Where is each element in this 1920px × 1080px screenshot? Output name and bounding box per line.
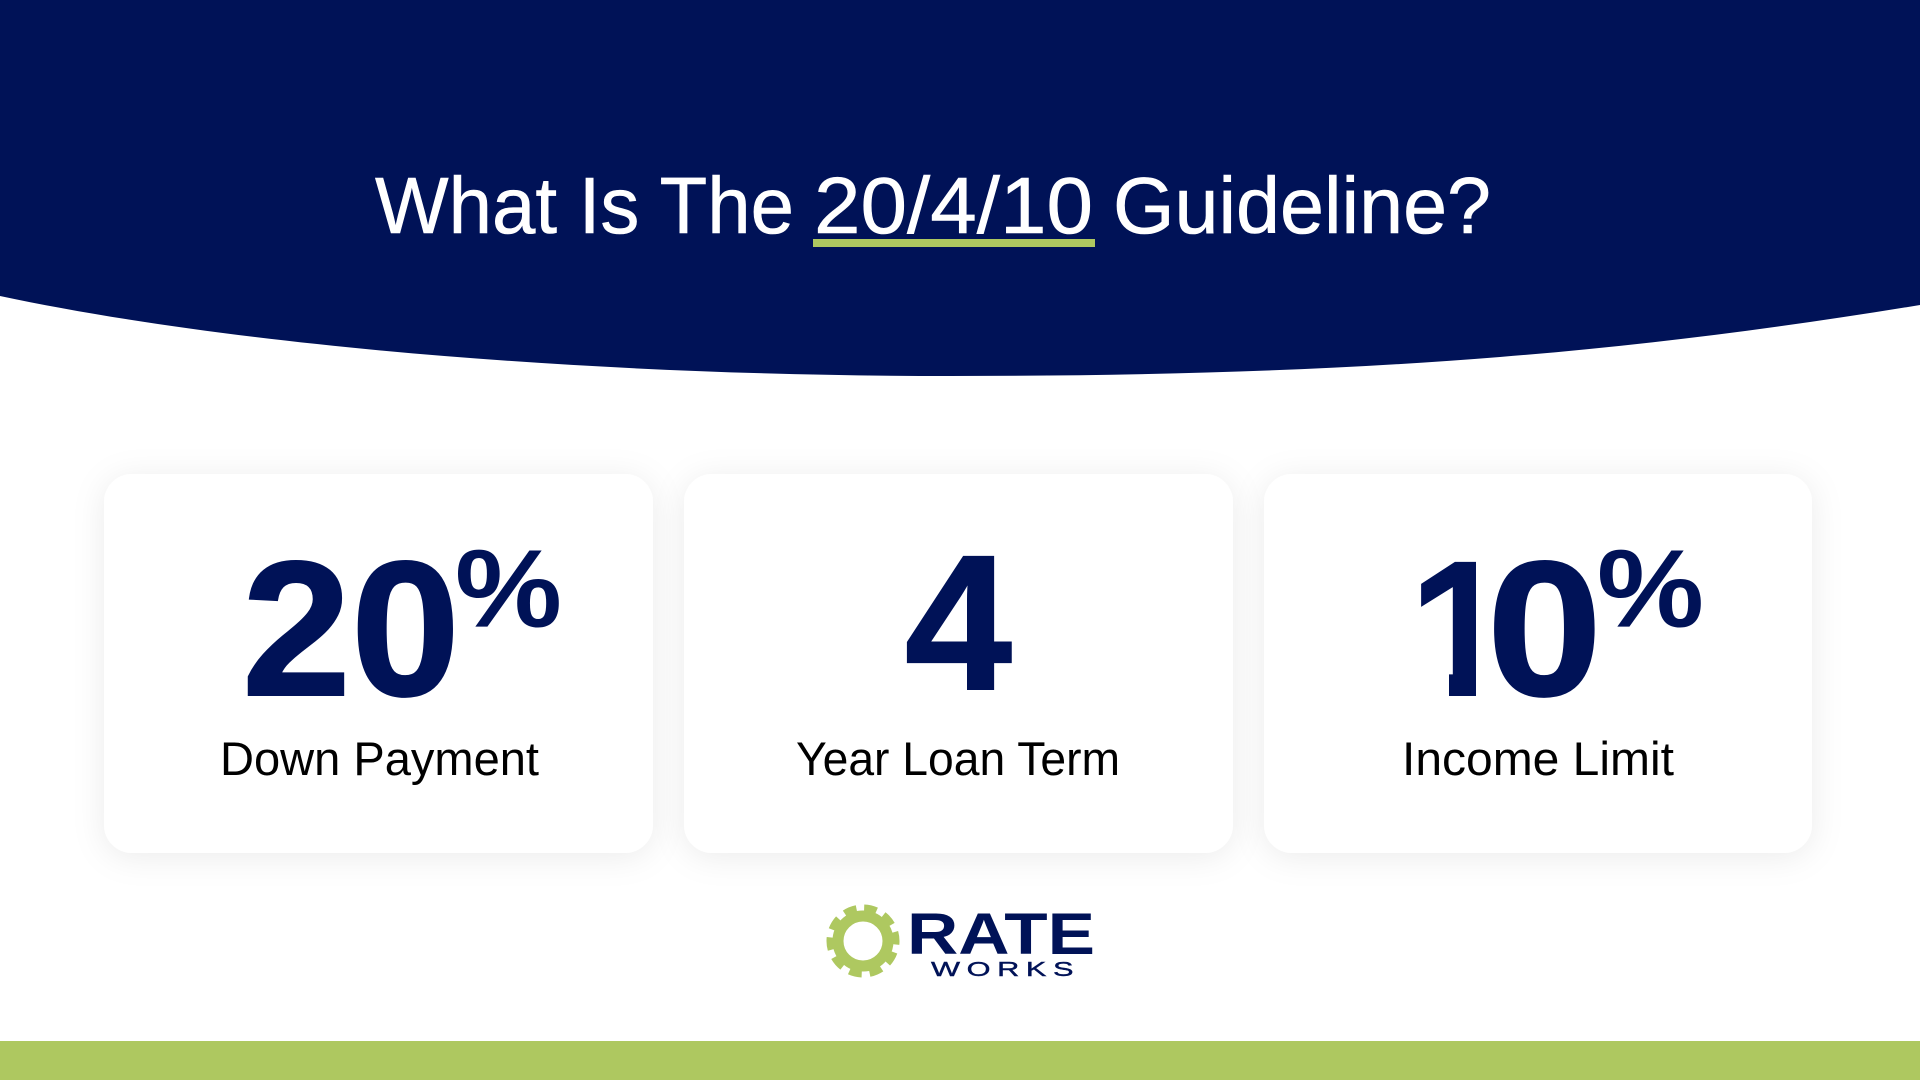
stat: 4: 4	[905, 515, 1012, 730]
label: year loan term: Year Loan Term	[796, 732, 1120, 785]
label: income limit: Income Limit	[1402, 732, 1674, 785]
icon: gear	[829, 907, 897, 975]
panel: income limit	[1264, 474, 1812, 853]
title underline	[813, 239, 1095, 247]
stat: 10 percent	[1421, 560, 1595, 698]
panel: loan term	[684, 474, 1233, 853]
stat: 10 percent: 1	[1409, 521, 1516, 736]
title: Guideline?	[1113, 161, 1491, 250]
panel: down payment	[104, 474, 653, 853]
header band	[0, 0, 1920, 376]
title: 20/4/10	[814, 161, 1093, 250]
logo wordmark: RATE	[907, 902, 1095, 967]
percent sign: %	[455, 528, 562, 650]
title: What Is The	[375, 161, 794, 250]
logo: rate works	[829, 902, 1095, 981]
label: down payment: Down Payment	[220, 732, 539, 785]
stat: 20 percent: 20	[242, 521, 460, 736]
percent sign: %	[1597, 528, 1704, 650]
stat: 10 percent: 0	[1487, 521, 1602, 736]
footer bar	[0, 1041, 1920, 1080]
title	[375, 161, 1491, 250]
logo subword: WORKS	[931, 957, 1074, 981]
